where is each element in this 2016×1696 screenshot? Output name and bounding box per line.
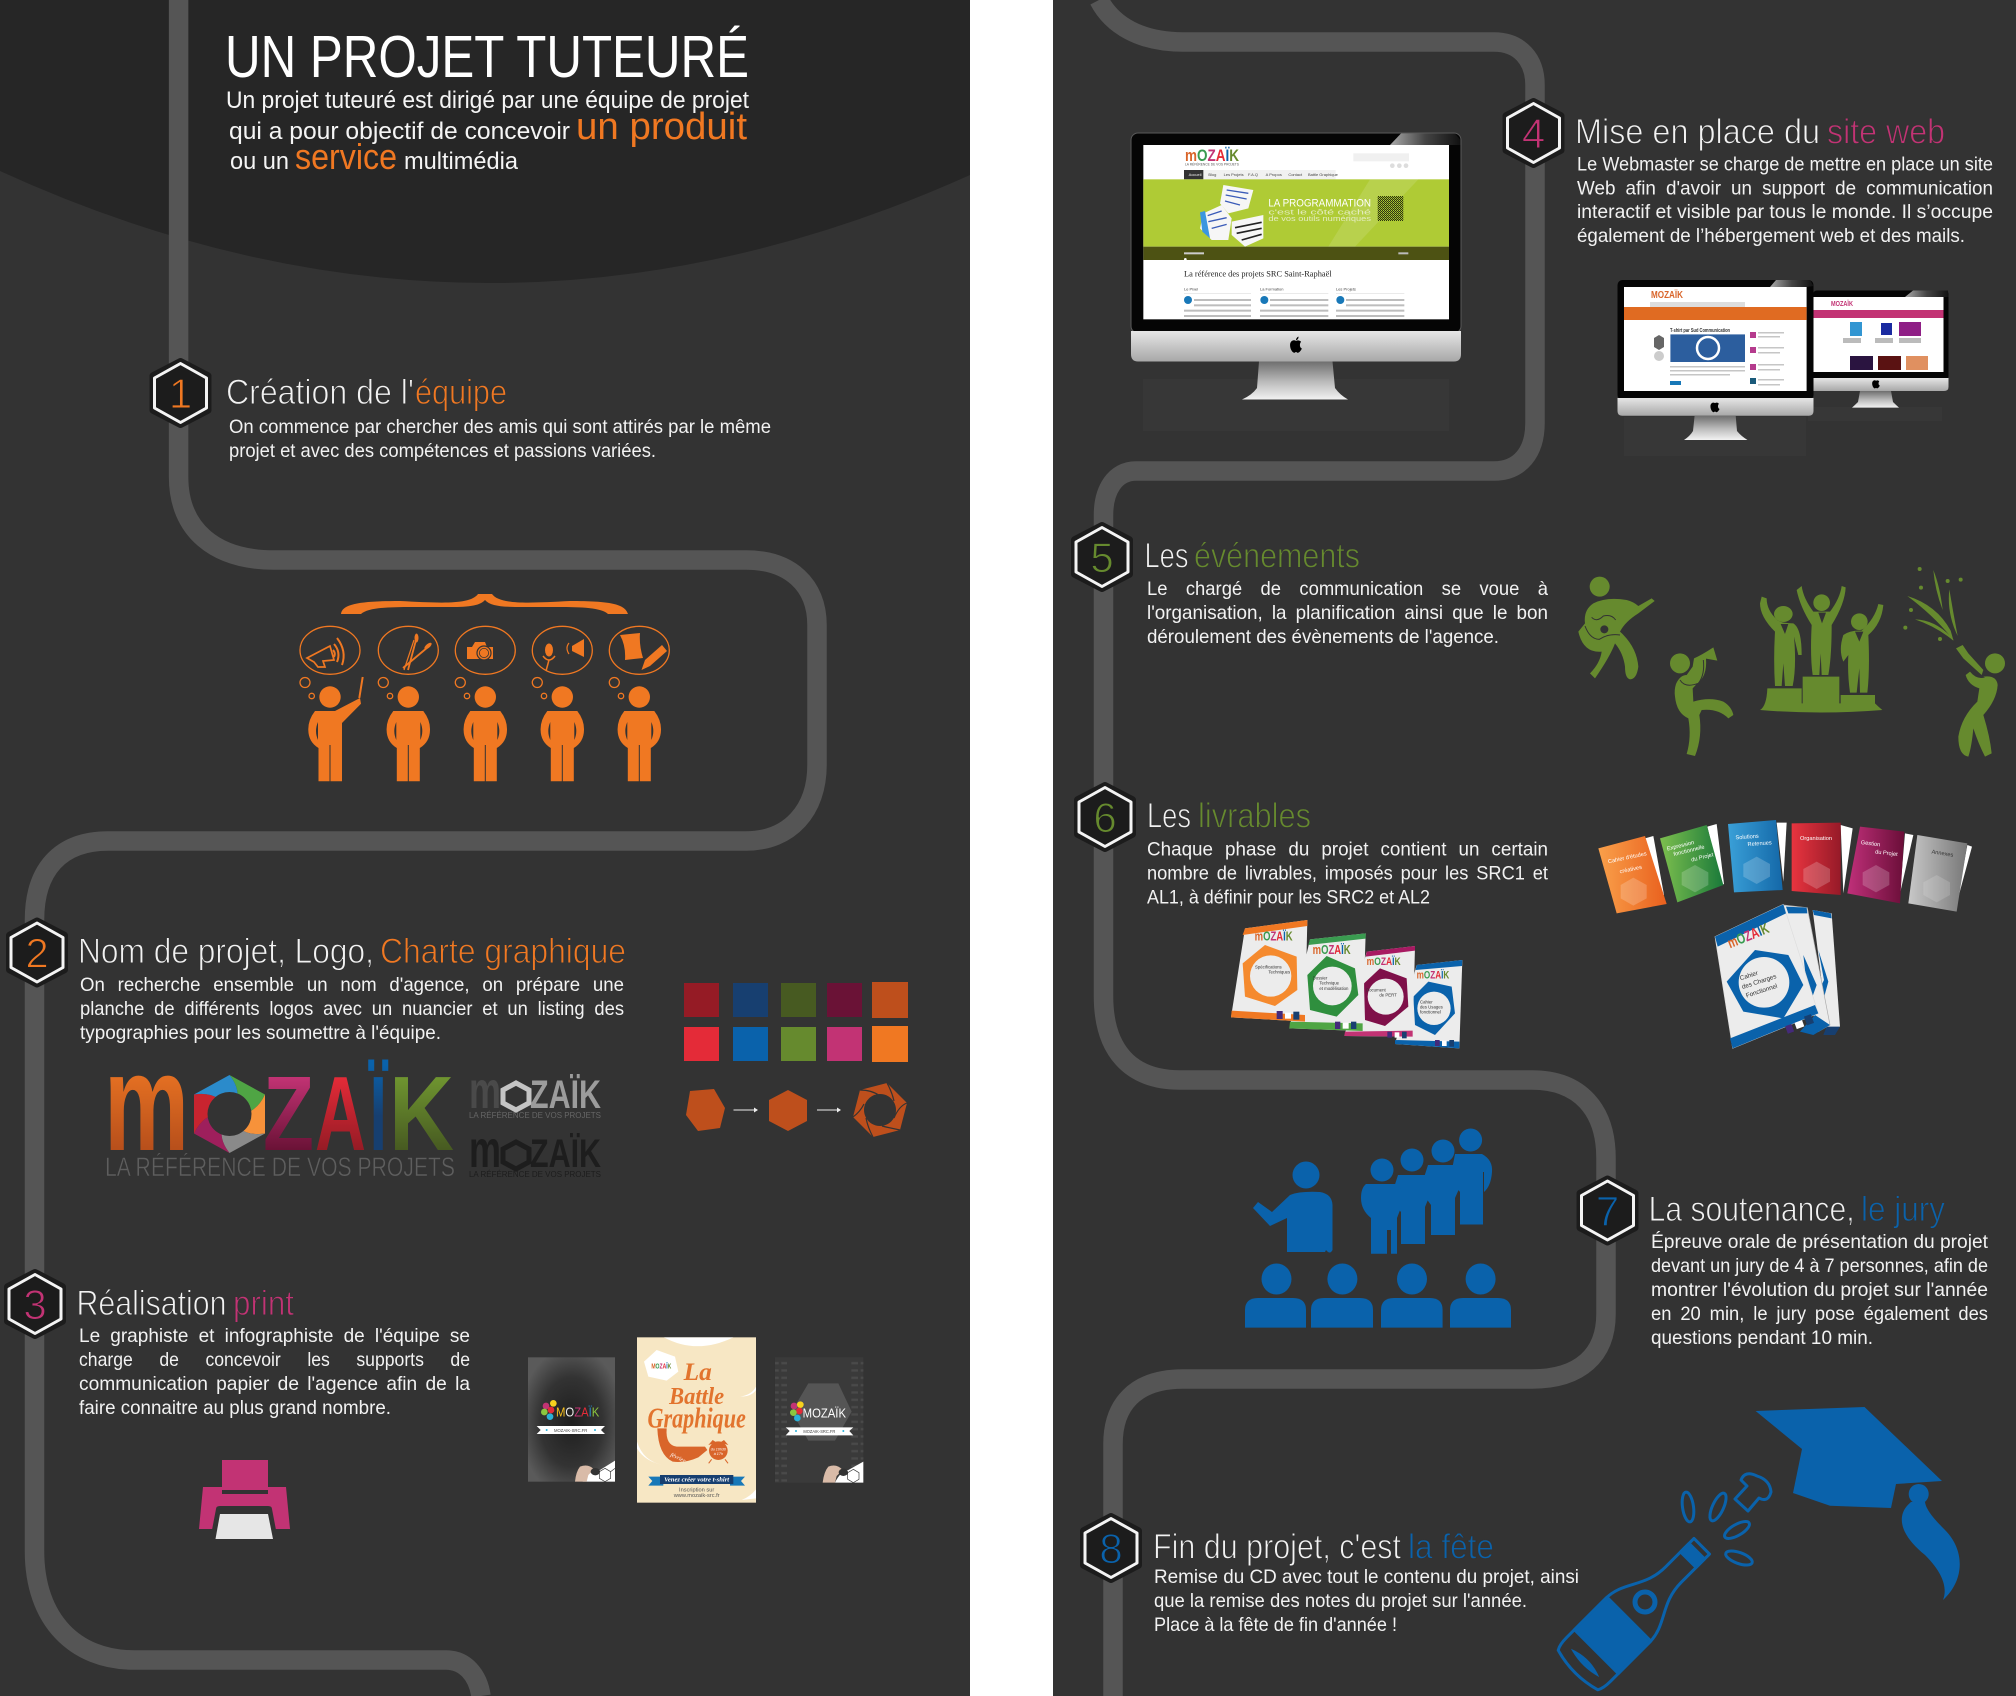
logo: Mozaïk grey: ZAÏK xyxy=(530,1073,601,1117)
step 7 text: devant un jury de 4 à 7 personnes, afin de xyxy=(1651,1255,1988,1277)
step 3 text xyxy=(79,1325,470,1419)
poster: Mozaïk dark 2: MOZAÏK xyxy=(803,1406,846,1420)
step 2 heading xyxy=(78,932,626,971)
logo: Mozaïk colour xyxy=(104,1026,455,1182)
step 3 text: Le graphiste et infographiste de l'équipe se xyxy=(79,1325,470,1347)
booklets: blue stack xyxy=(1715,904,1840,1048)
step 2 heading: Nom de projet, Logo, xyxy=(78,932,374,971)
step 4 text: Le Webmaster se charge de mettre en place un site xyxy=(1577,154,1993,176)
logo hexagon O xyxy=(194,1075,265,1153)
icon: person with champagne xyxy=(1903,567,2005,757)
step 2 text xyxy=(80,974,624,1044)
posters xyxy=(528,1337,863,1503)
step 7 text: questions pendant 10 min. xyxy=(1651,1327,1873,1349)
step 2 heading: Charte graphique xyxy=(380,932,626,971)
step 6 text: Chaque phase du projet contient un certain xyxy=(1147,838,1548,860)
step 5 heading: Les xyxy=(1144,536,1188,576)
intro text: ou un xyxy=(230,148,289,175)
icon: trumpet player xyxy=(1670,647,1733,756)
step 5 badge: 5 xyxy=(1090,534,1114,581)
event icons xyxy=(1578,567,2005,757)
colour swatches xyxy=(684,982,908,1062)
booklet red xyxy=(1792,823,1853,895)
logo: Mozaïk colour: Ï xyxy=(368,1055,389,1173)
timeline path right xyxy=(1099,0,1606,1696)
step 4 badge xyxy=(1506,102,1560,164)
step 5 text: déroulement des évènements de l'agence. xyxy=(1147,626,1499,648)
logo: Mozaïk grey: LA RÉFÉRENCE DE VOS PROJETS xyxy=(469,1110,601,1120)
booklets row: six coloured covers xyxy=(1598,820,1972,913)
cover blue: fonctionnel xyxy=(1420,1009,1441,1014)
step 5 heading xyxy=(1144,536,1360,576)
middle small iMac screenshot: T-shirt par Sud Communication xyxy=(1670,328,1730,334)
step 1 badge xyxy=(154,362,208,424)
step 7 badge xyxy=(1580,1180,1634,1242)
website screen: Accueil xyxy=(1189,172,1202,177)
booklet magenta: Gestion xyxy=(1860,840,1881,848)
cover green: mOZAÏK xyxy=(1313,942,1351,957)
dark title header shape xyxy=(0,0,970,283)
logo: Mozaïk colour: Z xyxy=(263,1055,314,1173)
step 7 text: montrer l'évolution du projet sur l'année xyxy=(1651,1279,1988,1301)
middle small iMac screenshot: MOZAÏK xyxy=(1651,288,1684,301)
cover magenta: mOZAÏK xyxy=(1367,955,1401,968)
step 5 text: l'organisation, la planification ainsi que le bon xyxy=(1147,602,1548,624)
team illustration xyxy=(300,594,669,781)
presenter xyxy=(1253,1162,1332,1252)
step 8 heading: Fin du projet, c'est xyxy=(1153,1528,1401,1567)
step 6 text xyxy=(1147,838,1549,908)
booklet magenta: du Projet xyxy=(1875,849,1898,858)
person 3 xyxy=(455,678,507,781)
website screen: Les Projets xyxy=(1336,287,1356,292)
icon: graduation cap xyxy=(1756,1407,1960,1600)
icon: presenter and jury xyxy=(1245,1128,1511,1328)
poster: La Battle Graphique: à 17h xyxy=(714,1452,723,1456)
poster: Mozaïk dark 2 xyxy=(775,1357,863,1483)
booklet blue: Retenues xyxy=(1747,840,1772,848)
step 3 text: charge de concevoir les supports de xyxy=(79,1349,470,1371)
step 8 badge xyxy=(1084,1517,1138,1579)
booklet grey: Annexes xyxy=(1931,849,1954,859)
booklet green: Expression xyxy=(1666,840,1695,853)
booklet red: Organisation xyxy=(1800,836,1832,842)
person with pointer xyxy=(300,677,363,781)
booklet magenta xyxy=(1847,827,1913,903)
step 3 badge xyxy=(8,1273,62,1335)
icon: camera xyxy=(467,642,493,660)
cover orange: Spécifications xyxy=(1255,964,1282,969)
poster: Mozaïk dark 1 xyxy=(528,1357,615,1482)
person 4 xyxy=(532,678,584,781)
poster: Mozaïk dark 1: MOZAIK-SRC.FR xyxy=(554,1428,588,1434)
step 8 badge: 8 xyxy=(1099,1525,1123,1572)
step 1 heading: Création de l' xyxy=(226,373,414,412)
cover orange xyxy=(1231,920,1307,1022)
step 6 heading xyxy=(1147,797,1311,836)
step 8 text: Remise du CD avec tout le contenu du projet, ainsi xyxy=(1154,1566,1579,1588)
booklet orange: Cahier d'études xyxy=(1608,851,1647,865)
front cover xyxy=(1715,904,1818,1048)
website screen: Battle Graphique xyxy=(1308,172,1339,177)
logo: Mozaïk grey: m xyxy=(469,1062,501,1120)
step 2 text: typographies pour les soumettre à l'équipe. xyxy=(80,1022,441,1044)
intro text: multimédia xyxy=(404,148,519,175)
step 4 text: interactif et visible par tous le monde. Il s’occupe xyxy=(1577,201,1993,223)
logo: Mozaïk black: ZAÏK xyxy=(530,1132,601,1176)
website screen: de vos outils numériques xyxy=(1268,216,1372,223)
thought bubbles xyxy=(300,626,669,674)
front cover: Fonctionnel xyxy=(1745,983,1778,1000)
step 7 text xyxy=(1651,1230,1989,1349)
timeline path left xyxy=(34,0,817,1696)
icon: champagne bottle xyxy=(1553,1474,1771,1695)
step 2 badge xyxy=(10,922,64,984)
cover blue: mOZAÏK xyxy=(1417,969,1450,982)
website screen: mOZAÏK xyxy=(1185,146,1239,165)
website screen xyxy=(1143,145,1449,319)
website screen: A Propos xyxy=(1266,172,1282,177)
website screen: LA RÉFÉRENCE DE VOS PROJETS xyxy=(1185,161,1240,166)
cover blue: Cahier xyxy=(1420,999,1433,1004)
poster: La Battle Graphique: Venez créer votre t-shirt xyxy=(664,1476,729,1483)
step 3 badge: 3 xyxy=(23,1281,47,1328)
logo: Mozaïk colour: LA RÉFÉRENCE DE VOS PROJETS xyxy=(105,1152,455,1182)
step 1 text: On commence par chercher des amis qui sont attirés par le même xyxy=(229,416,771,438)
step 1 text: projet et avec des compétences et passions variées. xyxy=(229,440,656,462)
step 5 heading: événements xyxy=(1194,536,1360,576)
step 3 text: faire connaitre au plus grand nombre. xyxy=(79,1397,391,1419)
step 4 heading: site web xyxy=(1827,113,1945,152)
step 7 heading: La soutenance, xyxy=(1649,1190,1855,1229)
booklets: four covers xyxy=(1231,920,1462,1048)
booklet green: fonctionnelle xyxy=(1673,844,1705,858)
step 8 text: que la remise des notes du projet sur l'année. xyxy=(1154,1590,1527,1612)
step 5 text xyxy=(1147,578,1548,648)
poster: La Battle Graphique xyxy=(637,1337,756,1503)
front cover: des Charges xyxy=(1741,973,1777,991)
logo: Mozaïk black: LA RÉFÉRENCE DE VOS PROJETS xyxy=(469,1169,601,1179)
logo: Mozaïk black xyxy=(469,1121,601,1179)
poster: Mozaïk dark 2: MOZAIK-SRC.FR xyxy=(803,1429,836,1435)
icon: microphone and speaker xyxy=(543,639,584,671)
icon: apple logo xyxy=(1290,337,1302,353)
cover orange: Techniques xyxy=(1268,969,1290,974)
panel: left column xyxy=(0,0,970,1696)
logo: Mozaïk colour: m xyxy=(104,1026,189,1180)
jury members xyxy=(1361,1128,1492,1254)
intro text: Un projet tuteuré est dirigé par une équipe de projet xyxy=(226,87,749,114)
right small iMac screenshot xyxy=(1808,290,1948,421)
icon: megaphone xyxy=(307,638,344,667)
step 1 badge: 1 xyxy=(169,370,192,417)
logo: Mozaïk colour: A xyxy=(315,1055,366,1173)
poster: La Battle Graphique: Graphique xyxy=(647,1403,746,1434)
step 7 text: Épreuve orale de présentation du projet xyxy=(1651,1230,1989,1253)
large iMac screenshot xyxy=(1131,133,1461,431)
step 1 text xyxy=(229,416,771,462)
step 8 text xyxy=(1154,1566,1579,1636)
poster: Mozaïk dark 1: MOZAÏK xyxy=(556,1406,600,1420)
logo: Mozaïk colour: K xyxy=(389,1055,454,1173)
panel: right column xyxy=(1053,0,2016,1696)
step 3 text: communication papier de l'agence afin de la xyxy=(79,1373,470,1395)
step 6 heading: Les xyxy=(1147,797,1191,836)
champagne drops xyxy=(1680,1491,1754,1568)
step 7 heading: le jury xyxy=(1861,1190,1945,1229)
step 2 text: planche de différents logos avec un nuancier et un listing des xyxy=(80,998,624,1020)
icon: paper and pencil xyxy=(620,633,667,670)
step 1 heading: équipe xyxy=(415,373,507,412)
poster: La Battle Graphique: MOZAÏK xyxy=(651,1363,671,1371)
step 3 heading: Réalisation xyxy=(76,1284,226,1323)
step 4 text: Web afin d'avoir un support de communication xyxy=(1577,178,1993,200)
right small iMac screenshot: MOZAÏK xyxy=(1831,300,1853,308)
cover green: Dossier xyxy=(1313,975,1328,980)
booklet orange xyxy=(1598,836,1667,913)
booklet blue: Solutions xyxy=(1735,834,1759,841)
website screen: Le Pixel xyxy=(1184,287,1198,292)
poster: La Battle Graphique: Inscription sur xyxy=(679,1487,714,1493)
front cover: mOZAÏK xyxy=(1725,920,1772,952)
poster: La Battle Graphique: La xyxy=(683,1358,712,1386)
intro text: service xyxy=(295,136,397,177)
icon: printer xyxy=(199,1460,290,1539)
poster: La Battle Graphique: Battle xyxy=(668,1384,724,1410)
booklet green xyxy=(1660,824,1724,902)
icon: guitarist xyxy=(1578,577,1655,679)
cover blue xyxy=(1395,960,1462,1048)
intro text: qui a pour objectif de concevoir xyxy=(229,118,570,145)
intro text xyxy=(226,87,749,177)
step 8 text: Place à la fête de fin d'année ! xyxy=(1154,1614,1397,1636)
audience xyxy=(1245,1264,1511,1328)
poster: La Battle Graphique: du 10h30 xyxy=(711,1448,726,1452)
step 2 text: On recherche ensemble un nom d'agence, on prépare une xyxy=(80,974,624,996)
website screen: F.A.Q xyxy=(1248,172,1258,177)
step 6 text: AL1, à définir pour les SRC2 et AL2 xyxy=(1147,886,1430,908)
middle booklet xyxy=(1783,905,1830,1035)
cover green: Technique xyxy=(1319,981,1340,986)
middle small iMac screenshot xyxy=(1618,280,1814,456)
step 8 heading: la fête xyxy=(1408,1528,1494,1567)
booklet green: du Projet xyxy=(1691,852,1715,864)
step 6 heading: livrables xyxy=(1198,797,1311,836)
icon: brushes xyxy=(403,634,433,670)
cover magenta: de PERT xyxy=(1379,993,1397,998)
logo: Mozaïk grey xyxy=(469,1062,601,1120)
step 4 text xyxy=(1577,154,1993,247)
cover blue: des Usages xyxy=(1420,1004,1443,1009)
champagne cork xyxy=(1735,1474,1771,1511)
website screen: LA PROGRAMMATION xyxy=(1268,198,1371,210)
website screen: La Formation xyxy=(1260,287,1283,292)
cover green: et modélisation xyxy=(1319,986,1349,991)
title: UN PROJET TUTEURÉ xyxy=(225,24,749,90)
step 7 text: en 20 min, le jury pose également des xyxy=(1651,1303,1988,1325)
cover magenta: Document xyxy=(1366,988,1387,993)
front cover: Cahier xyxy=(1739,970,1759,982)
logo: Mozaïk black: m xyxy=(469,1121,501,1179)
website screen: Les Projets xyxy=(1224,172,1244,177)
step 2 badge: 2 xyxy=(25,930,49,976)
step 5 text: Le chargé de communication se voue à xyxy=(1147,578,1548,600)
step 5 badge xyxy=(1075,526,1129,588)
person 2 xyxy=(378,678,430,781)
intro text: un produit xyxy=(576,106,747,148)
brace xyxy=(341,594,628,614)
step 4 text: également de l’hébergement web et des mails. xyxy=(1577,225,1965,247)
website screen: c'est le côté caché xyxy=(1268,209,1371,216)
cover green xyxy=(1289,933,1366,1031)
step 6 text: nombre de livrables, imposés pour les SRC1 et xyxy=(1147,862,1549,884)
website screen: Blog xyxy=(1208,172,1216,177)
back booklet xyxy=(1813,910,1840,1035)
booklet blue xyxy=(1728,820,1787,892)
icon: podium with winners xyxy=(1760,586,1883,712)
step 4 heading: Mise en place du xyxy=(1575,113,1820,152)
cover orange: mOZAÏK xyxy=(1255,929,1293,944)
step 3 heading: print xyxy=(233,1284,294,1323)
booklet grey xyxy=(1908,835,1972,912)
step 6 badge: 6 xyxy=(1093,794,1117,841)
poster: La Battle Graphique: www.mozaik-src.fr xyxy=(673,1493,720,1499)
cover magenta xyxy=(1344,946,1415,1038)
person 5 xyxy=(609,678,661,781)
step 4 badge: 4 xyxy=(1522,110,1545,157)
website screen: Contact xyxy=(1288,172,1303,177)
step 7 badge: 7 xyxy=(1596,1188,1619,1234)
logo construction sequence xyxy=(686,1083,907,1137)
step 6 badge xyxy=(1078,786,1132,848)
website screen: La référence des projets SRC Saint-Raphaël xyxy=(1184,270,1332,279)
poster: La Battle Graphique: février xyxy=(669,1451,687,1465)
booklet orange: créatives xyxy=(1619,865,1643,875)
